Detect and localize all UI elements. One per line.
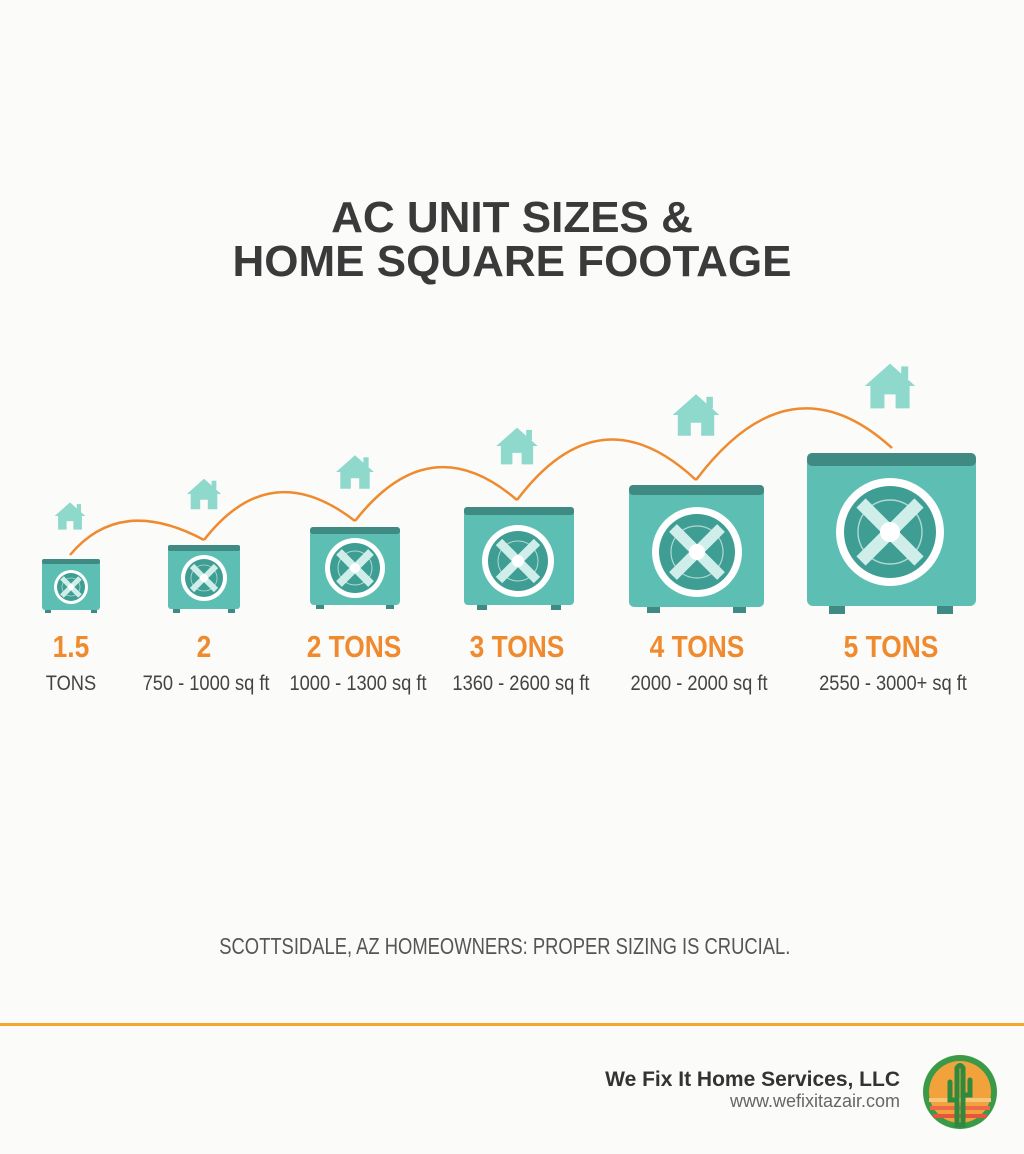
- size labels: 5 TONS: [844, 630, 938, 665]
- ac units: [42, 453, 976, 614]
- unit 6: [807, 453, 976, 614]
- size labels: 2000 - 2000 sq ft: [631, 672, 768, 695]
- title: HOME SQUARE FOOTAGE: [233, 237, 791, 286]
- size labels: 1000 - 1300 sq ft: [289, 672, 427, 695]
- arcs connecting units: [70, 408, 892, 555]
- unit 1: [42, 559, 100, 613]
- title: AC UNIT SIZES &: [331, 193, 693, 242]
- logo: [923, 1055, 997, 1129]
- company info: We Fix It Home Services, LLC: [605, 1068, 900, 1091]
- size labels: 3 TONS: [470, 630, 564, 665]
- company info: [605, 1068, 900, 1111]
- size labels: TONS: [46, 672, 96, 695]
- size labels: 4 TONS: [650, 630, 744, 665]
- note text: SCOTTSIDALE, AZ HOMEOWNERS: PROPER SIZING IS CRUCIAL.: [219, 934, 790, 960]
- size labels: 2550 - 3000+ sq ft: [819, 672, 967, 695]
- title: [233, 193, 791, 286]
- houses: [55, 364, 915, 530]
- unit 4: [464, 507, 574, 610]
- size labels: 2 TONS: [307, 630, 401, 665]
- size labels: 750 - 1000 sq ft: [143, 672, 270, 695]
- size labels: 1.5: [53, 630, 89, 665]
- company info: www.wefixitazair.com: [729, 1091, 900, 1111]
- size labels: [46, 630, 967, 695]
- size labels: 1360 - 2600 sq ft: [452, 672, 590, 695]
- unit 3: [310, 527, 400, 609]
- size labels: 2: [197, 630, 211, 665]
- unit 5: [629, 485, 764, 613]
- unit 2: [168, 545, 240, 613]
